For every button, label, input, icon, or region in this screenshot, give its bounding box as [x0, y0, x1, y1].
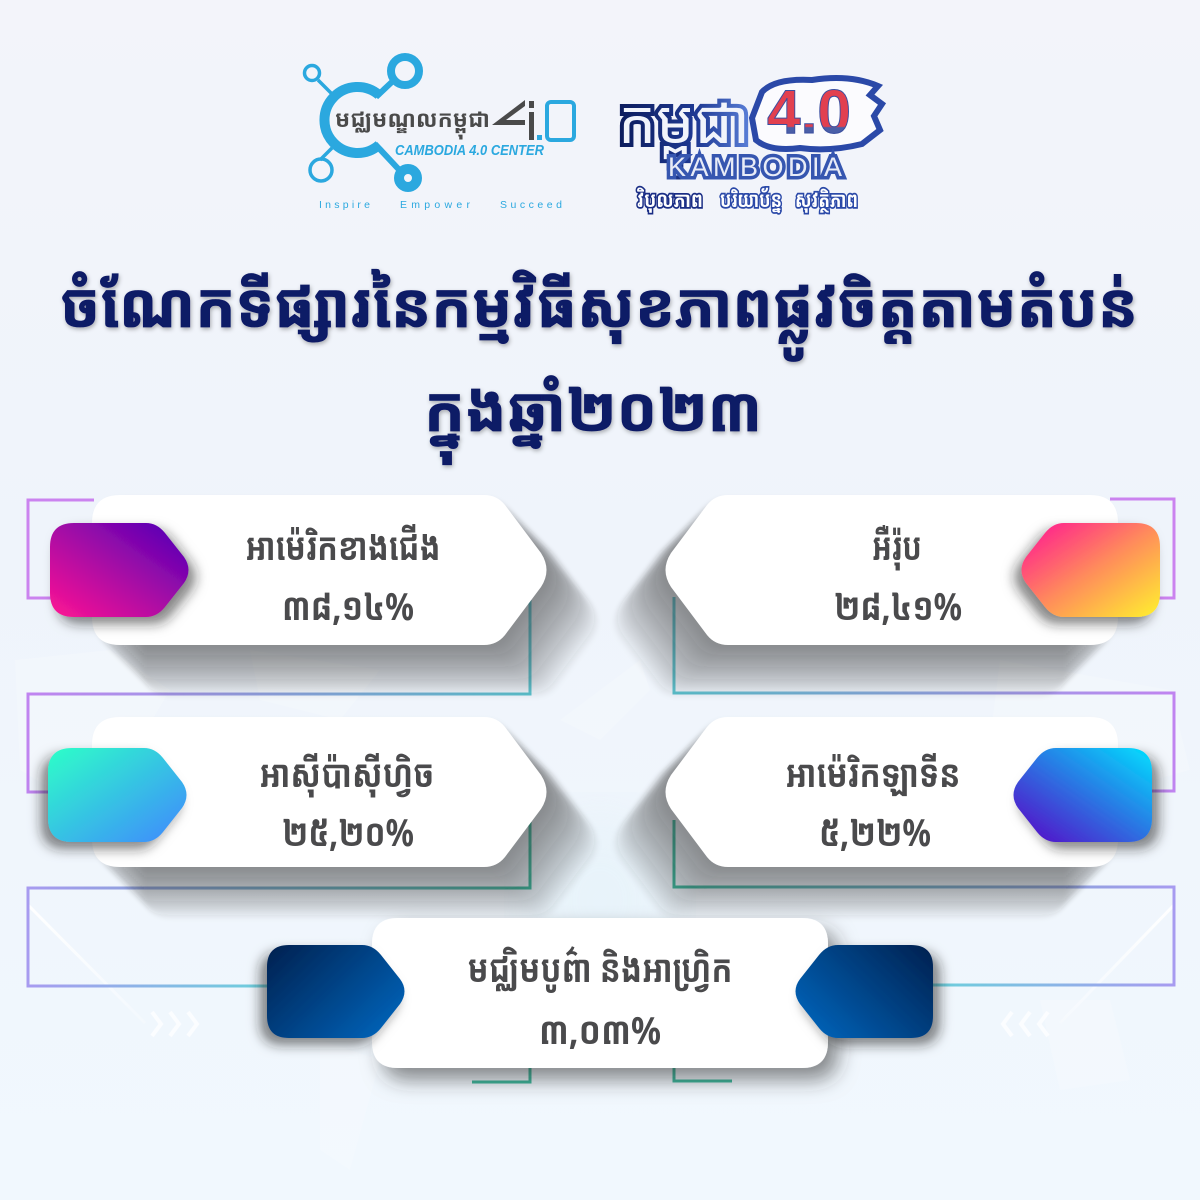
card: North America	[50, 495, 598, 697]
logo: Kambodia 4.0: សុវត្ថិភាព	[795, 186, 858, 214]
card: Asia Pacific: ២៥,២០%	[282, 806, 414, 858]
card: Latin America: ៥,២២%	[819, 806, 931, 858]
faint world map	[15, 650, 1190, 1170]
logo: Kambodia 4.0	[618, 78, 882, 214]
card: Latin America: អាម៉េរិកឡាទីន	[786, 747, 960, 799]
logo: Cambodia 4.0 Center: Succeed	[500, 199, 562, 211]
title: ចំណែកទីផ្សារនៃកម្មវិធីសុខភាពផ្លូវចិត្តតាមតំបន់	[60, 262, 1138, 361]
card: Asia Pacific	[48, 717, 598, 919]
card: North America: ៣៨,១៤%	[282, 580, 414, 632]
logo: Cambodia 4.0 Center: Empower	[400, 199, 470, 211]
logo: Cambodia 4.0 Center	[304, 57, 574, 211]
card: Latin America	[614, 717, 1152, 919]
title	[60, 262, 1138, 464]
card: Europe: អឺរ៉ុប	[872, 520, 922, 572]
white diagonal light lines and chevrons	[28, 905, 1174, 1036]
logo: Kambodia 4.0: វិបុលភាព	[637, 186, 703, 214]
logo: Kambodia 4.0: កម្ពុជា	[618, 79, 750, 175]
soft centre tint	[520, 810, 680, 990]
tag: Europe	[1022, 523, 1160, 617]
card: Europe: ២៨,៤១%	[834, 580, 962, 632]
logo: Cambodia 4.0 Center: Inspire	[319, 199, 370, 211]
logo: Cambodia 4.0 Center: មជ្ឈមណ្ឌលកម្ពុជា	[335, 102, 490, 140]
card: Asia Pacific: អាស៊ីប៉ាស៊ីហ្វិច	[260, 747, 434, 799]
title: ក្នុងឆ្នាំ២០២៣	[424, 366, 762, 464]
tag: Latin America	[1014, 748, 1152, 842]
tag: right dark blue	[796, 945, 933, 1038]
card: Middle East and Africa	[267, 918, 933, 1068]
logo: Cambodia 4.0 Center: CAMBODIA 4.0 CENTER	[395, 143, 544, 159]
logo: Kambodia 4.0: បរិយាប័ន្ន	[720, 186, 782, 214]
logo: Kambodia 4.0: 4.0	[767, 78, 851, 147]
tag: North America	[50, 523, 188, 617]
card: Europe	[614, 495, 1160, 697]
card: North America: អាម៉េរិកខាងជើង	[246, 520, 440, 572]
card: Middle East and Africa: ៣,០៣%	[539, 1004, 661, 1056]
logo: Kambodia 4.0: KAMBODIA	[668, 152, 842, 182]
tag: left dark blue	[267, 945, 404, 1038]
card: Middle East and Africa: មជ្ឈិមបូព៌ា និងអាហ្វ្រិក	[468, 942, 732, 994]
connector lines	[28, 499, 1174, 1082]
tag: Asia Pacific	[48, 748, 186, 842]
